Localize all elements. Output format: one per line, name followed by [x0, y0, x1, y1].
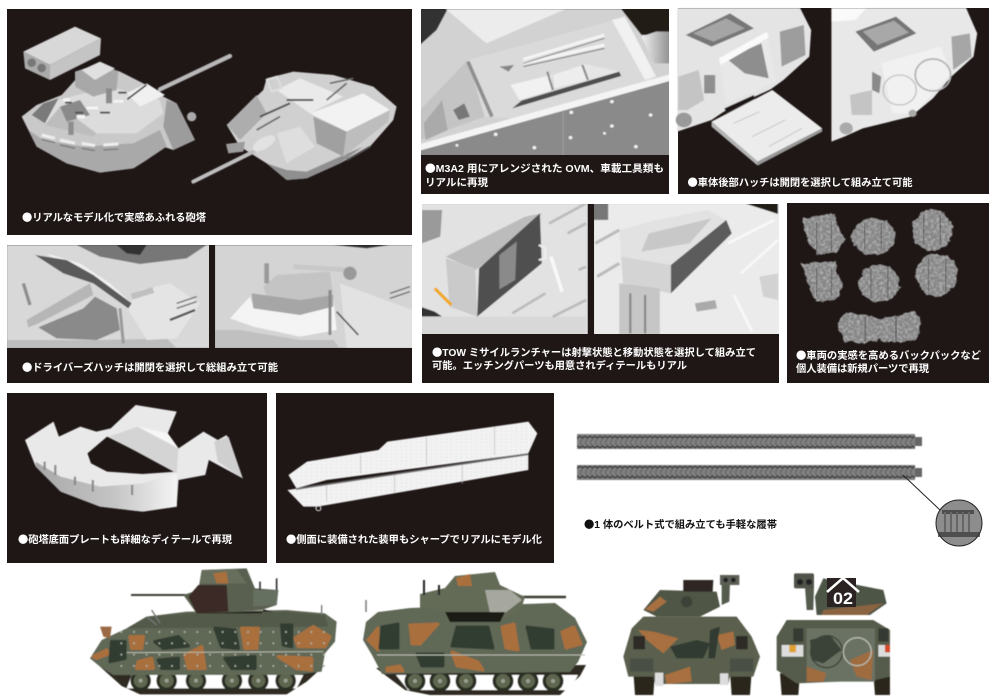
caption: TOW launcher: ●TOW ミサイルランチャーは射撃状態と移動状態を選択して組み立て [432, 344, 756, 359]
illustration: rear hatch open and closed [676, 8, 977, 166]
unit marking 02: 02 [833, 589, 853, 608]
vehicle: left side view [90, 568, 337, 694]
vehicle: right side view [363, 572, 587, 695]
caption: tracks: ●1 体のベルト式で組み立ても手軽な履帯 [584, 516, 777, 531]
caption: TOW launcher [432, 344, 756, 372]
track upper [577, 434, 922, 449]
caption: base plate: ●砲塔底面プレートも詳細なディテールで再現 [18, 531, 233, 546]
tracks [577, 434, 982, 546]
caption: OVM: リアルに再現 [425, 177, 489, 189]
illustration: launcher travel position [593, 203, 782, 335]
panel: OVM and tools [420, 9, 671, 194]
caption: rear hatch: ●車体後部ハッチは開閉を選択して組み立て可能 [688, 174, 913, 189]
panel: driver's hatch [7, 245, 415, 383]
vehicle: front view [623, 575, 760, 695]
illustration: launcher firing position [420, 203, 588, 335]
illustration: hull side tools [420, 9, 671, 156]
caption: OVM: ●M3A2 用にアレンジされた OVM、車載工具類も [425, 160, 664, 175]
panel: backpacks [787, 203, 989, 383]
track detail magnifier [936, 500, 982, 546]
illustration: base plate [25, 405, 243, 512]
panel: turret base plate [7, 393, 267, 563]
panel: TOW launcher [420, 203, 782, 383]
caption: backpacks: ●車両の実感を高めるバックパックなど [796, 347, 982, 362]
illustration: side armor plates [287, 422, 537, 511]
caption: TOW launcher: 可能。エッチングパーツも用意されディテールもリアル [432, 359, 688, 372]
illustration: hatch closed [215, 245, 415, 348]
caption: side armor: ●側面に装備された装甲もシャープでリアルにモデル化 [286, 531, 543, 546]
illustration: hatch open [7, 245, 210, 348]
panel: turret [7, 9, 412, 235]
panel: side armor [276, 393, 554, 563]
caption: driver's hatch: ●ドライバーズハッチは開閉を選択して総組み立て可能 [22, 359, 279, 374]
caption: OVM [425, 160, 664, 189]
panel: rear hatch [676, 8, 989, 194]
caption: turret: ●リアルなモデル化で実感あふれる砲塔 [22, 209, 207, 224]
track lower [577, 465, 922, 480]
caption: backpacks: 個人装備は新規パーツで再現 [796, 362, 930, 375]
illustration: backpacks [802, 209, 957, 343]
leader line [903, 475, 940, 510]
illustration: exploded turret with launcher [22, 27, 397, 182]
caption: backpacks [796, 347, 982, 375]
vehicle: rear view [777, 573, 890, 695]
